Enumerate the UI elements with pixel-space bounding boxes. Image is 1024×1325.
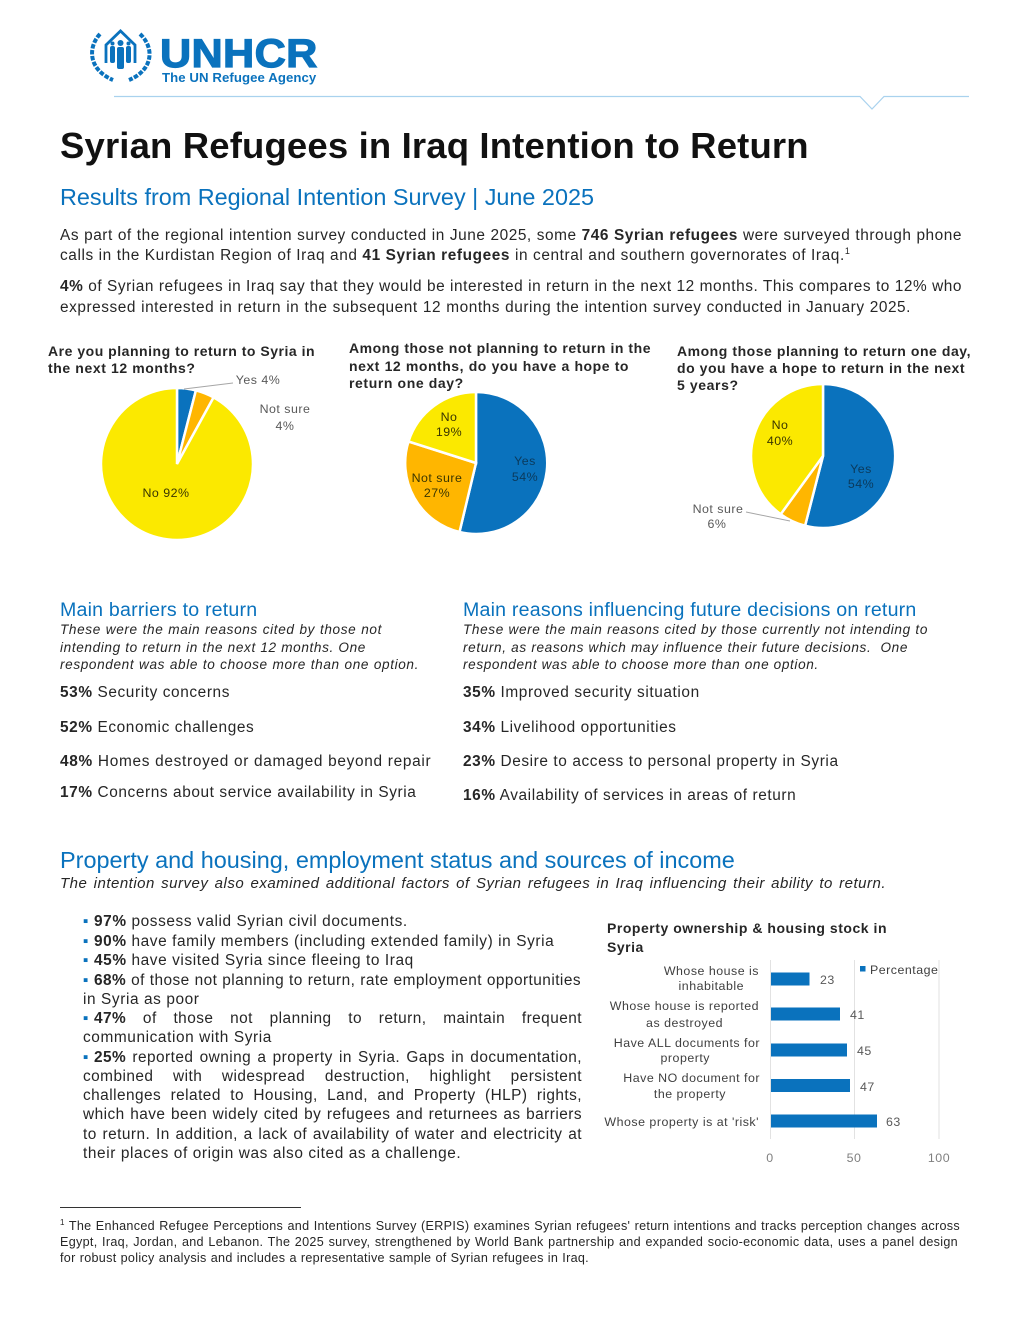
intro paragraph 1: calls in the Kurdistan Region of Iraq and 41 Syrian refugees in central and southern governorates of Iraq.1	[60, 246, 850, 264]
pie chart 2: Not sure	[412, 471, 462, 485]
axis labels: 50	[847, 1151, 861, 1165]
pie 2 question: return one day?	[349, 375, 464, 391]
bullet: property ownership: their places of origin was also cited as a challenge.	[83, 1145, 461, 1162]
pie chart 2: 19%	[436, 425, 462, 439]
bullet: property ownership: challenges related to Housing, Land, and Property (HLP) rights,	[83, 1087, 582, 1104]
pie chart 3: 6%	[708, 517, 726, 531]
reasons description	[463, 622, 928, 672]
bullet: communication	[83, 1010, 582, 1046]
pie chart 3: No	[772, 418, 788, 432]
bullet: employment	[83, 972, 581, 1008]
pie chart 3: 40%	[767, 434, 793, 448]
axis labels	[766, 1151, 950, 1165]
reasons description: return, as reasons which may influence their future decisions. One	[463, 640, 908, 655]
intro paragraph 2: expressed interested in return in the subsequent 12 months during the intention survey conducted in January 2025.	[60, 299, 911, 316]
bullet: family: 90% have family members (including extended family) in Syria	[94, 933, 554, 950]
footnote: Egypt, Iraq, Jordan, and Lebanon. The 2025 survey, strengthened by World Bank partnership and expanded socio-economic data, uses a panel design	[60, 1235, 958, 1249]
legend: Percentage	[870, 963, 938, 977]
pie chart 3: Not sure	[693, 502, 743, 516]
category labels: as destroyed	[646, 1016, 723, 1030]
pie panel 1: planning to return in 12 months	[48, 343, 315, 539]
pie chart 2	[406, 393, 546, 533]
bullet: property ownership	[83, 1049, 582, 1162]
section heading: property and housing: Property and housing, employment status and sources of income	[60, 847, 735, 873]
bullet: employment: 68% of those not planning to return, rate employment opportunities	[94, 972, 581, 989]
barriers description	[60, 622, 419, 672]
category labels: Whose property is at 'risk'	[604, 1115, 759, 1129]
pie chart 2: No	[441, 410, 457, 424]
barrier: economic: 52% Economic challenges	[60, 719, 254, 736]
barrier: homes: 48% Homes destroyed or damaged beyond repair	[60, 753, 431, 770]
panel: main barriers to return	[60, 599, 431, 801]
pie 1 question: the next 12 months?	[48, 360, 196, 376]
logo tagline: The UN Refugee Agency	[162, 70, 316, 84]
bullet: property ownership: 25% reported owning a property in Syria. Gaps in documentation,	[94, 1049, 582, 1066]
bullet: civil documents: ▪	[83, 913, 88, 930]
category labels: Whose house is	[664, 964, 759, 978]
bullet: visited: ▪	[83, 952, 88, 969]
bullet: family: ▪	[83, 933, 88, 950]
subtitle: Results from Regional Intention Survey | June 2025	[60, 184, 594, 210]
pie 3 question: 5 years?	[677, 377, 739, 393]
bar chart title: Syria	[607, 939, 644, 955]
reasons description: These were the main reasons cited by those currently not intending to	[463, 622, 928, 637]
pie chart 2: Yes	[514, 454, 536, 468]
category labels: the property	[654, 1087, 726, 1101]
category labels: Have NO document for	[623, 1071, 760, 1085]
category labels: property	[661, 1051, 710, 1065]
pie chart 2: 27%	[424, 486, 450, 500]
pie 3 question: Among those planning to return one day,	[677, 343, 971, 359]
footnote rule	[60, 1207, 301, 1208]
barriers description: intending to return in the next 12 months. One	[60, 640, 366, 655]
category labels: Whose house is reported	[610, 999, 759, 1013]
bullet: employment: ▪	[83, 972, 88, 989]
pie chart 3: Yes	[850, 462, 872, 476]
bar chart: property ownership and housing stock	[604, 920, 950, 1165]
reason: property: 23% Desire to access to personal property in Syria	[463, 753, 839, 770]
reason: livelihood: 34% Livelihood opportunities	[463, 719, 677, 736]
pie panel 3: hope to return in 5 years	[677, 343, 971, 531]
section intro: The intention survey also examined additional factors of Syrian refugees in Iraq influencing their ability to return.	[60, 875, 886, 892]
bar values	[820, 973, 901, 1129]
pie 2 question: Among those not planning to return in the	[349, 340, 651, 356]
pie 3 question	[677, 343, 971, 393]
barrier: services: 17% Concerns about service availability in Syria	[60, 784, 416, 801]
bulleted findings	[83, 913, 582, 1162]
barriers description: These were the main reasons cited by those not	[60, 622, 382, 637]
pie 1 question	[48, 343, 315, 376]
bullet: communication: communication with Syria	[83, 1029, 272, 1046]
bullet: visited: 45% have visited Syria since fleeing to Iraq	[94, 952, 414, 969]
header rule with notch	[114, 96, 969, 110]
pie chart 1: No 92%	[142, 486, 190, 500]
category labels: inhabitable	[679, 979, 744, 993]
pie chart 3: 54%	[848, 477, 874, 491]
bar values: 23	[820, 973, 835, 987]
intro paragraph 1	[60, 227, 962, 264]
barriers heading: Main barriers to return	[60, 599, 257, 621]
reason: security: 35% Improved security situation	[463, 684, 700, 701]
pie 1 question: Are you planning to return to Syria in	[48, 343, 315, 359]
axis labels: 100	[928, 1151, 950, 1165]
pie chart 3	[693, 385, 894, 531]
footnote	[60, 1218, 960, 1265]
intro paragraph 2	[60, 278, 962, 316]
header logo: UNHCR	[90, 29, 318, 84]
reasons description: respondent was able to choose more than one option.	[463, 657, 819, 672]
bullet: civil documents: 97% possess valid Syrian civil documents.	[94, 913, 408, 930]
intro paragraph 1: As part of the regional intention survey conducted in June 2025, some 746 Syrian refugees were surveyed through phone	[60, 227, 962, 244]
reasons heading: Main reasons influencing future decisions on return	[463, 599, 916, 621]
bar values: 47	[860, 1080, 875, 1094]
bar chart title: Property ownership & housing stock in	[607, 920, 887, 936]
intro paragraph 2: 4% of Syrian refugees in Iraq say that they would be interested in return in the next 12 months. This compares to 12% who	[60, 278, 962, 295]
category labels: Have ALL documents for	[614, 1036, 760, 1050]
pie chart 1: 4%	[276, 419, 294, 433]
logo wordmark: UNHCR	[160, 32, 318, 76]
footnote: for robust policy analysis and includes a representative sample of Syrian refugees in Iraq.	[60, 1251, 589, 1265]
pie chart 1: Yes 4%	[236, 373, 280, 387]
pie chart 1	[102, 373, 310, 539]
pie chart 2: 54%	[512, 470, 538, 484]
bars	[771, 972, 877, 1128]
pie 2 question	[349, 340, 651, 391]
bullet: property ownership: to return. In addition, a lack of availability of water and electricity at	[83, 1126, 582, 1143]
bullet: employment: in Syria as poor	[83, 991, 200, 1008]
bar values: 45	[857, 1044, 872, 1058]
bar chart title	[607, 920, 887, 955]
bullet: property ownership: combined with widespread destruction, highlight persistent	[83, 1068, 582, 1085]
pie 3 question: do you have a hope to return in the next	[677, 360, 965, 376]
icon: UNHCR emblem	[90, 29, 152, 82]
barrier: security: 53% Security concerns	[60, 684, 230, 701]
axis labels: 0	[766, 1151, 774, 1165]
bullet: property ownership: ▪	[83, 1049, 88, 1066]
barriers description: respondent was able to choose more than one option.	[60, 657, 419, 672]
pie 2 question: next 12 months, do you have a hope to	[349, 358, 629, 374]
bar values: 63	[886, 1115, 901, 1129]
title: Syrian Refugees in Iraq Intention to Return	[60, 125, 809, 166]
bar values: 41	[850, 1008, 865, 1022]
bullet: communication: ▪	[83, 1010, 88, 1027]
reason: services: 16% Availability of services in areas of return	[463, 787, 796, 804]
footnote: 1 The Enhanced Refugee Perceptions and Intentions Survey (ERPIS) examines Syrian refugees' return intentions and tracks perception changes across	[60, 1218, 960, 1233]
bullet: property ownership: which have been widely cited by refugees and returnees as barriers	[83, 1106, 582, 1123]
bullet: communication: 47% of those not planning to return, maintain frequent	[94, 1010, 582, 1027]
pie panel 2: hope to return one day	[349, 340, 651, 533]
panel: main reasons influencing future decisions	[463, 599, 928, 804]
pie chart 1: Not sure	[260, 402, 310, 416]
category labels	[604, 964, 760, 1129]
